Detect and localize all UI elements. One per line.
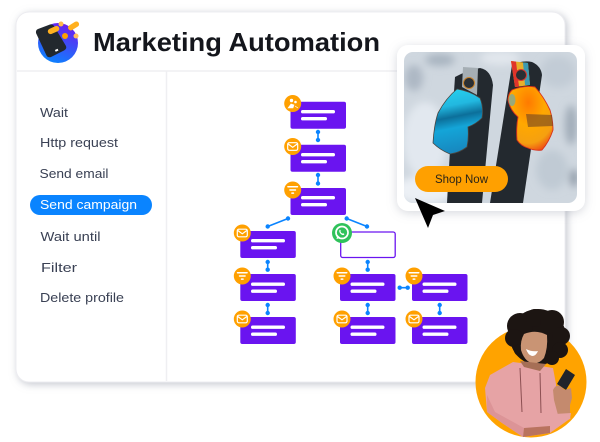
- sidebar menu: [30, 105, 152, 305]
- icon: logo phone: [36, 20, 80, 63]
- sidebar menu: Delete profile: [40, 290, 124, 305]
- flow node: filter right: [406, 268, 468, 301]
- sidebar menu: Wait: [40, 105, 68, 120]
- flow node: email left bottom: [234, 310, 296, 344]
- hair: [505, 309, 570, 365]
- hand and forearm: [553, 386, 572, 415]
- flow connectors: [266, 130, 442, 315]
- flow node: email 1: [284, 138, 346, 172]
- hoodie: [485, 362, 571, 437]
- shop now button: [415, 166, 508, 192]
- flow node: filter left: [234, 268, 296, 301]
- main card: [16, 12, 565, 382]
- face: [521, 332, 547, 363]
- icon: cursor arrow: [415, 198, 445, 228]
- selected item: send campaign: [30, 195, 152, 215]
- campaign preview card: [395, 45, 585, 211]
- product photo: ski goggles: [395, 51, 578, 204]
- sidebar menu: Wait until: [40, 229, 101, 244]
- selected item: send campaign: Send campaign: [40, 197, 137, 212]
- sidebar menu: Http request: [40, 135, 118, 150]
- flow node: email right: [406, 310, 468, 344]
- flow node: audience: [284, 95, 346, 129]
- shop now button: Shop Now: [435, 172, 488, 186]
- flow node: filter 1: [284, 182, 346, 215]
- flow node: filter middle: [334, 268, 396, 301]
- phone: [557, 369, 575, 390]
- flow node: email left: [234, 224, 296, 258]
- flow node: whatsapp: [332, 223, 395, 258]
- sidebar menu: Send email: [40, 166, 109, 181]
- flow node: email middle: [334, 310, 396, 344]
- title: Marketing Automation: [93, 27, 380, 57]
- neck: [520, 361, 546, 371]
- person with phone: [476, 309, 586, 438]
- sidebar menu: Filter: [41, 260, 78, 275]
